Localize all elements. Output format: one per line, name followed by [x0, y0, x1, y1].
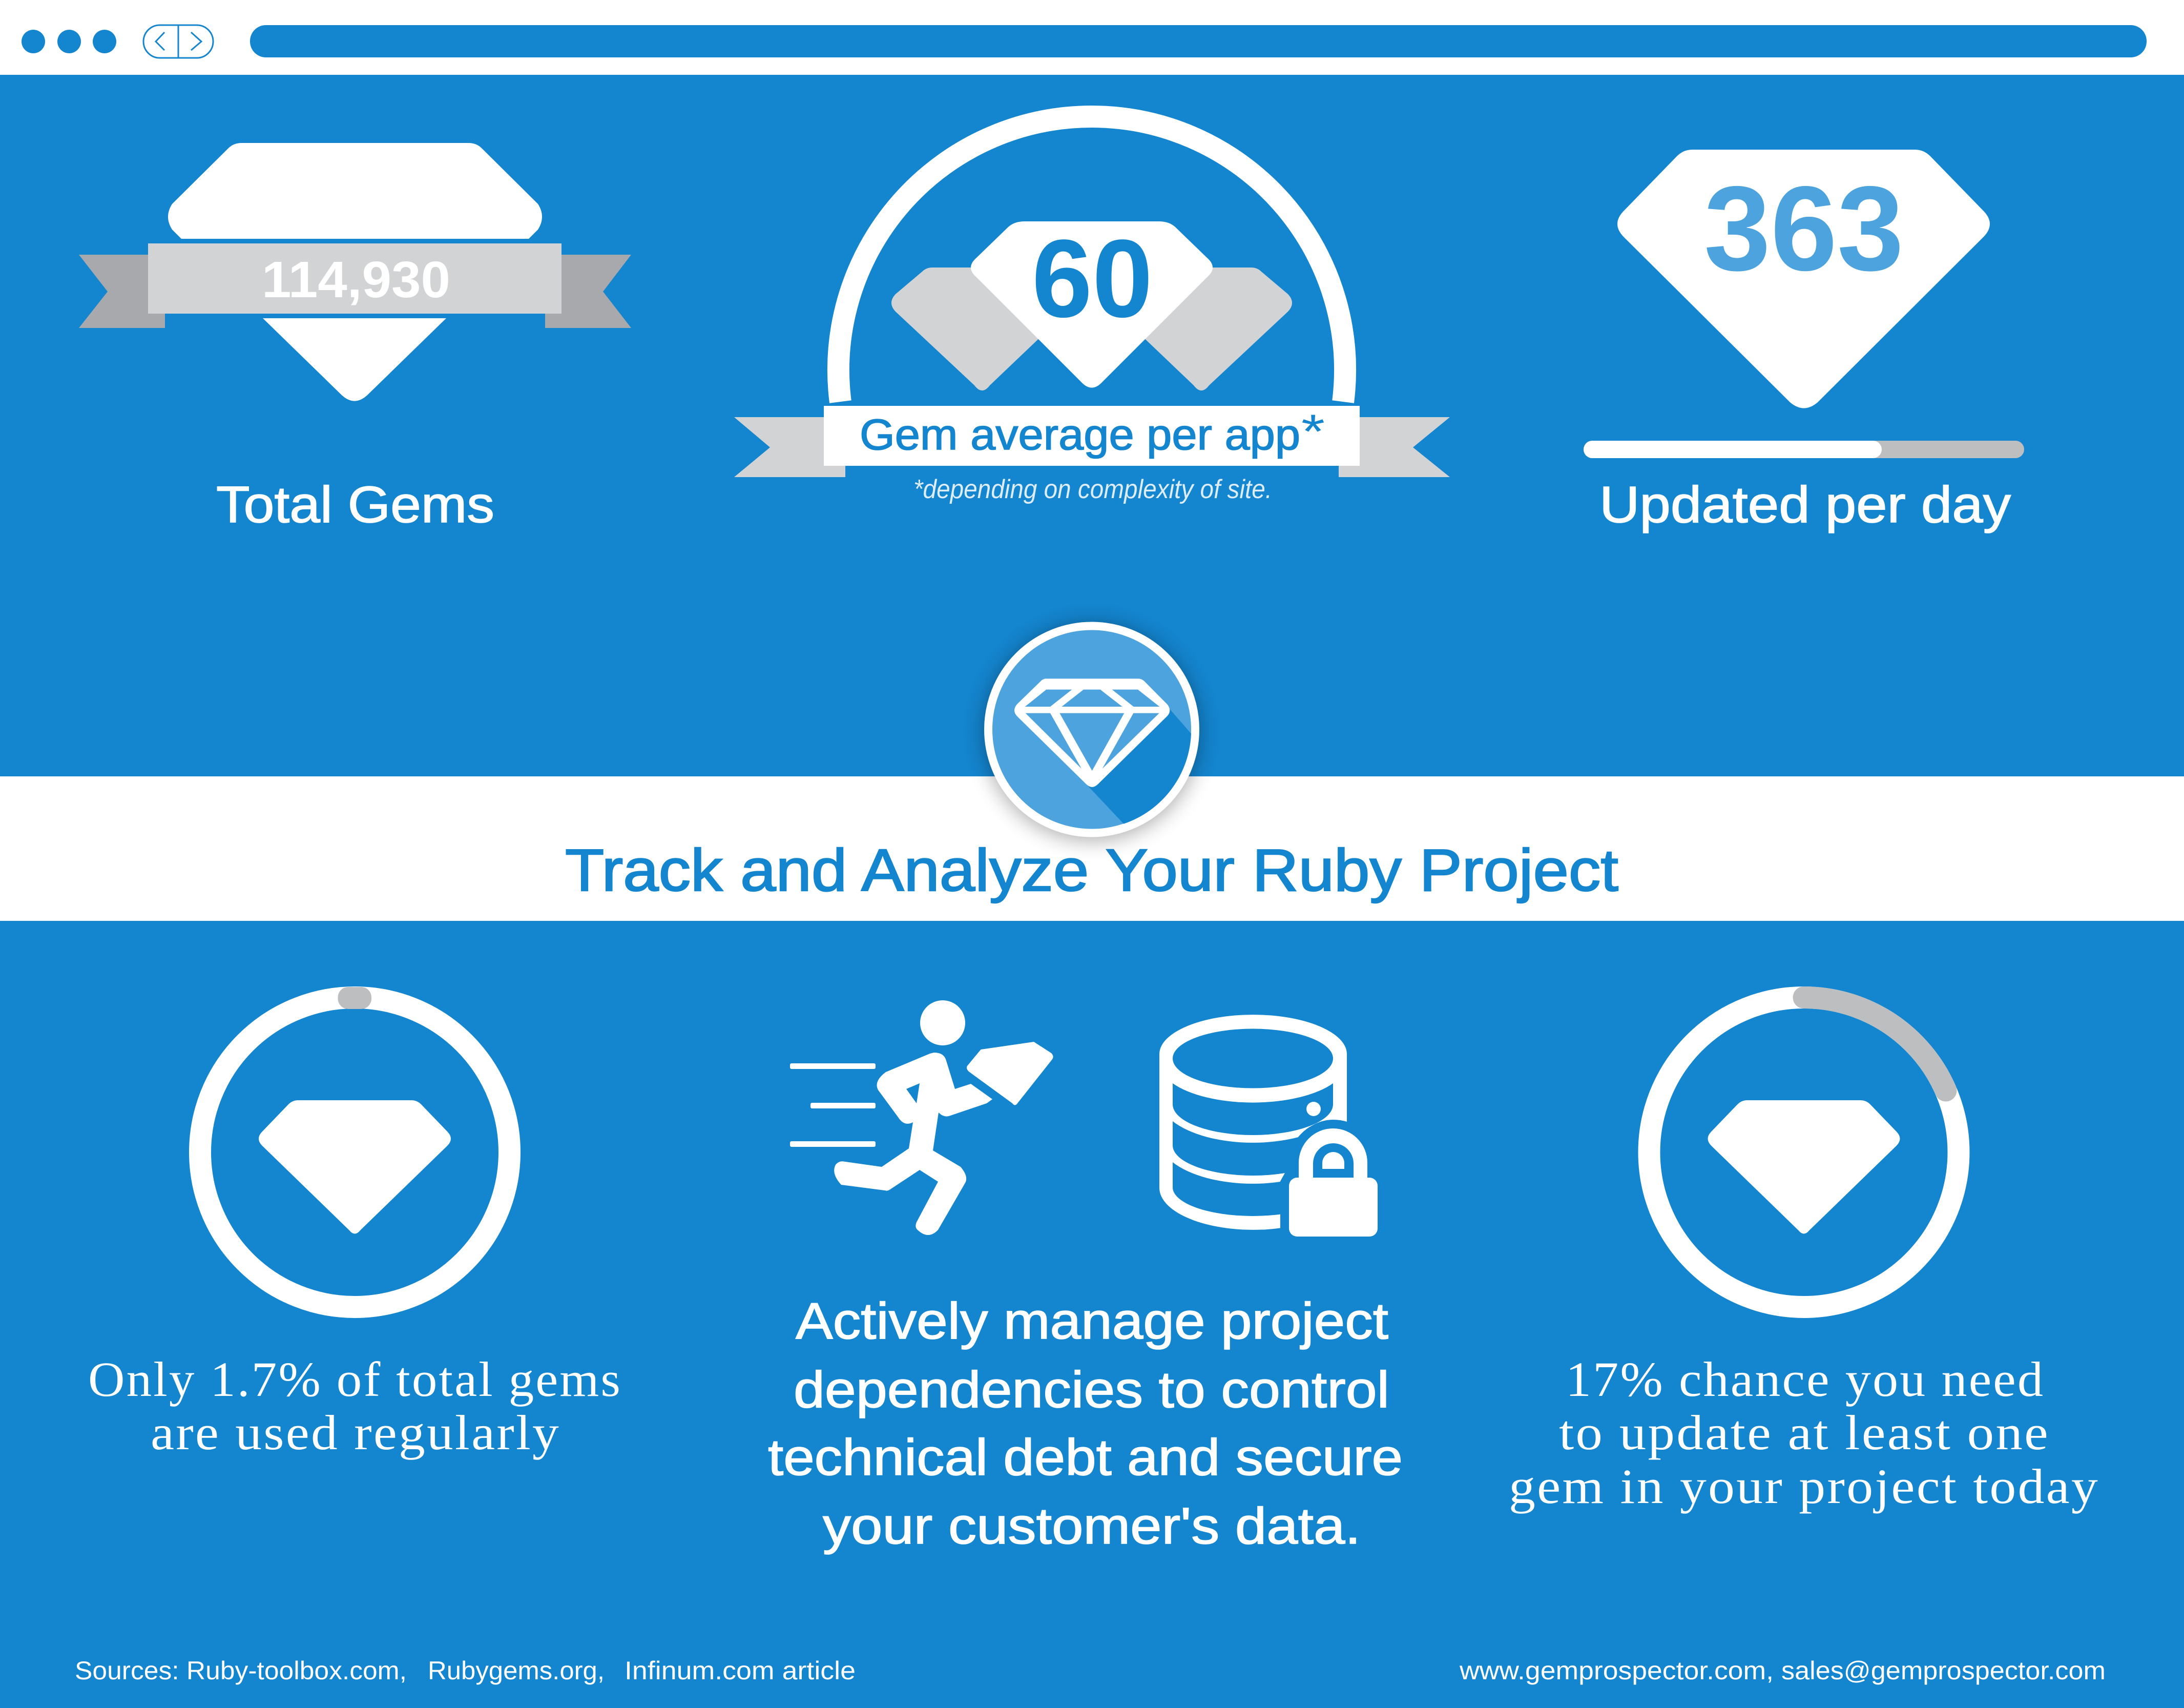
- heading: Track and Analyze Your Ruby Project: [565, 837, 1618, 903]
- contact: sales@gemprospector.com: [1781, 1656, 2106, 1685]
- panel: 1.7 percent gauge: [88, 987, 622, 1460]
- text: 17 percent: gem in your project today: [1509, 1459, 2099, 1514]
- text: only 1.7 percent: [88, 1352, 622, 1460]
- ring gauge: [1649, 997, 1959, 1307]
- panel: updated per day: [1584, 150, 2024, 533]
- text: actively manage: dependencies to control: [794, 1361, 1389, 1418]
- sources: [75, 1656, 856, 1685]
- ring gauge: [200, 987, 509, 1307]
- asterisk: *: [1301, 404, 1325, 458]
- browser toolbar: [0, 0, 2184, 75]
- number: 60: 60: [1032, 216, 1153, 340]
- sources: Rubygems.org,: [428, 1656, 605, 1685]
- icon: three gems: [891, 221, 1292, 390]
- sources: Infinum.com article: [625, 1656, 856, 1685]
- icon: gem: [1708, 1100, 1900, 1234]
- text: actively manage: Actively manage project: [796, 1292, 1388, 1350]
- ribbon: [734, 406, 1450, 477]
- contact: [1459, 1656, 2106, 1685]
- sources: Sources: Ruby-toolbox.com,: [75, 1656, 407, 1685]
- footnote: *depending on complexity of site.: [913, 475, 1272, 504]
- label: Gem average per app: Gem average per app: [860, 410, 1300, 459]
- text: only 1.7 percent: are used regularly: [151, 1405, 560, 1460]
- icon: gem: [1617, 150, 1990, 408]
- icon: database with lock: [1159, 1015, 1383, 1245]
- icon: running man with gem: [790, 1000, 1053, 1235]
- progress bar: [1584, 441, 2024, 458]
- text: 17 percent: [1509, 1352, 2099, 1514]
- text: actively manage: your customer's data.: [823, 1497, 1361, 1555]
- text: 17 percent: 17% chance you need: [1566, 1352, 2045, 1407]
- label: Updated per day: Updated per day: [1599, 476, 2011, 533]
- arch: [838, 117, 1345, 402]
- icon: gem: [259, 1100, 451, 1234]
- icon: diamond badge: [983, 623, 1200, 840]
- text: actively manage: technical debt and secure: [768, 1429, 1403, 1486]
- label: Total Gems: Total Gems: [216, 476, 494, 533]
- number: 114,930: 114,930: [262, 251, 450, 308]
- panel: manage dependencies: [768, 1000, 1403, 1555]
- panel: gem average per app: [734, 117, 1450, 504]
- panel: 17 percent gauge: [1509, 997, 2099, 1514]
- text: actively manage: [768, 1292, 1403, 1555]
- text: only 1.7 percent: Only 1.7% of total gems: [88, 1352, 622, 1407]
- panel: total gems: [79, 143, 631, 533]
- contact: www.gemprospector.com,: [1459, 1656, 1774, 1685]
- heading band: [0, 776, 2184, 921]
- icon: gem with ribbon: [79, 143, 631, 401]
- number: 363: 363: [1704, 161, 1904, 296]
- text: 17 percent: to update at least one: [1559, 1405, 2050, 1460]
